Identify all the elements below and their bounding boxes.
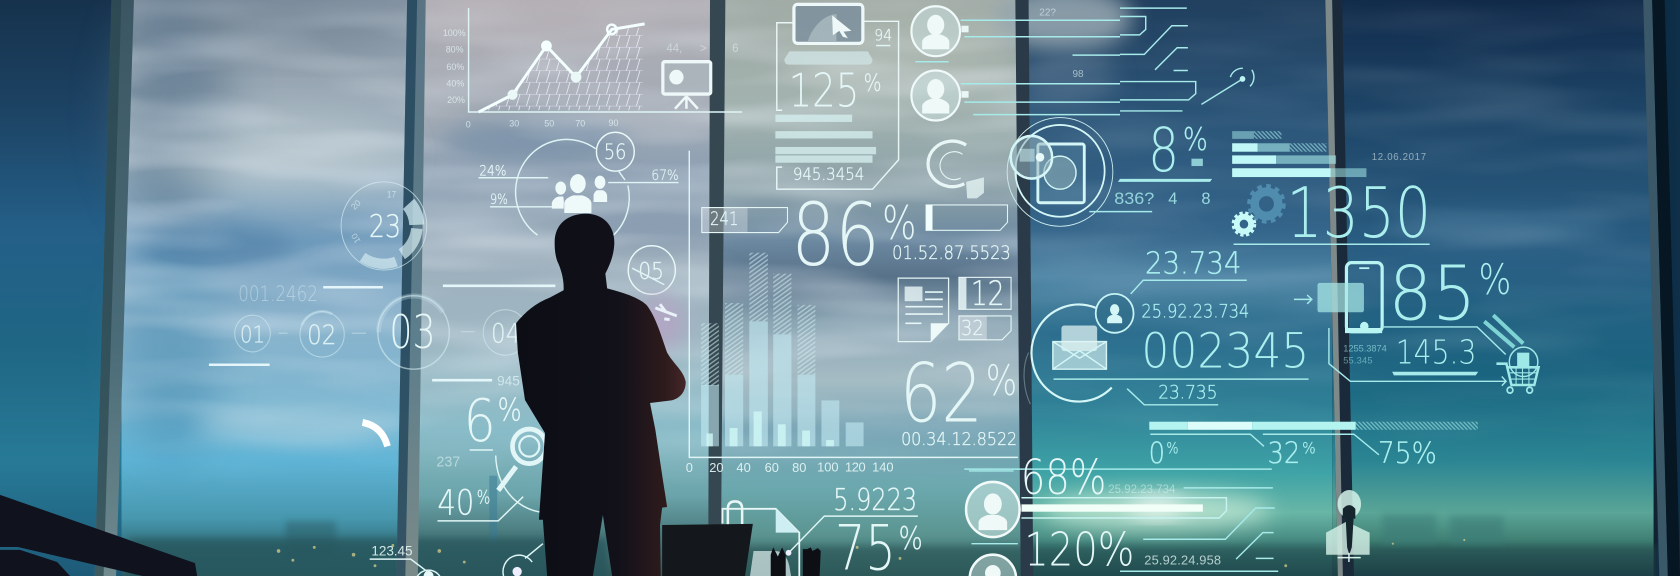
stat: 8 percent: 4	[1168, 189, 1177, 208]
line chart: 90	[609, 118, 619, 128]
stat: 8 percent	[1089, 116, 1212, 212]
stat: 62 percent: 62	[900, 347, 983, 441]
dashes and number 001.2462: 001.2462	[238, 281, 318, 306]
line chart: 30	[509, 119, 519, 129]
stat: 8 percent: 8	[1148, 116, 1179, 186]
people circle and percentages: 9%	[490, 192, 508, 208]
people circle and percentages	[479, 132, 679, 235]
bar chart: 120	[845, 460, 866, 475]
progress bar with 0, 32, 75 percent: %	[1166, 438, 1179, 458]
box 32: 32	[961, 317, 984, 340]
progress bar with 0, 32, 75 percent: 32	[1268, 435, 1300, 470]
inner bars	[706, 411, 834, 446]
panel: user rows	[911, 6, 1196, 120]
bar chart: 40	[736, 460, 751, 475]
step circles 01 to 04: 03	[389, 306, 436, 359]
progress bar with 0, 32, 75 percent: %	[1302, 438, 1316, 458]
user circle bottom	[970, 555, 1016, 576]
stat: 1350: 1350	[1286, 173, 1431, 254]
people circle and percentages: 56	[604, 139, 626, 164]
stat: 86 percent: 86	[791, 186, 880, 287]
tag 241: 241	[710, 209, 739, 230]
gauge: 23: 23	[369, 209, 401, 245]
stat: 68 percent with bar: 25.92.23.734	[1108, 484, 1176, 496]
circle 05	[628, 246, 675, 294]
line chart: 60%	[446, 62, 464, 72]
value: 145.3	[1343, 333, 1478, 375]
values: 23.734 and 25.92.23.734: 25.92.23.734	[1141, 302, 1249, 323]
icon: tablet rings and speech bubble	[1007, 118, 1113, 226]
panel: laptop report card: %	[864, 69, 881, 97]
arrow to cart	[1329, 328, 1506, 386]
value: 002345: 23.735	[1158, 382, 1218, 404]
stat: 85 percent: 85	[1389, 250, 1476, 338]
stat: 6 percent	[436, 374, 522, 471]
stacked bars	[1232, 131, 1426, 177]
icon: shopping cart	[1484, 315, 1539, 393]
bar chart	[686, 151, 1018, 475]
stat: 86 percent	[791, 186, 1011, 287]
panel: laptop report card	[775, 4, 899, 189]
values: 23.734 and 25.92.23.734	[1131, 246, 1249, 323]
stat: 6 percent: 237	[436, 454, 460, 471]
stacked bars: 12.06.2017	[1372, 152, 1426, 163]
stat: 8 percent: 836?	[1114, 189, 1154, 208]
dashes and number 001.2462	[209, 281, 555, 380]
gauge: 23: 10	[349, 231, 362, 245]
stat: 75 percent: %	[899, 521, 923, 557]
hatched bars	[701, 253, 815, 386]
stat: 40 percent: %	[477, 487, 490, 508]
step circles 01 to 04	[235, 296, 528, 369]
icon: mail in circle with user	[1024, 294, 1134, 404]
people circle and percentages: 67%	[651, 168, 679, 184]
value: 002345	[1054, 324, 1309, 405]
values: 23.734 and 25.92.23.734: 23.734	[1145, 246, 1241, 282]
stat: 6 percent: 945	[497, 374, 520, 389]
chair silhouette	[0, 495, 197, 576]
box 32	[959, 316, 1011, 340]
circle 05: 05	[638, 259, 664, 285]
stat: 86 percent: %	[882, 196, 916, 250]
stat: 62 percent: %	[986, 355, 1017, 405]
value: 145.3: 55.345	[1343, 355, 1373, 366]
icon: C arc and note	[928, 141, 984, 198]
line chart	[443, 8, 742, 129]
icon: laptop	[784, 4, 872, 65]
laptop silhouette on desk	[662, 524, 753, 576]
stat: 40 percent	[438, 483, 523, 523]
line chart: 50	[544, 119, 554, 129]
progress bar with 0, 32, 75 percent: 75%	[1378, 435, 1437, 470]
stat: 8 percent: %	[1183, 121, 1208, 158]
label 123.45	[370, 543, 442, 576]
panel: laptop report card: 94	[874, 25, 892, 44]
line chart: 6	[732, 43, 739, 55]
line chart: 44,	[666, 43, 682, 55]
report bars	[775, 115, 876, 163]
value: 145.3: 145.3	[1396, 333, 1476, 372]
line chart: 100%	[443, 28, 466, 38]
icon: gears	[1233, 186, 1284, 235]
empty progress box	[926, 205, 1008, 230]
pink glow and dart	[636, 296, 686, 351]
icon: magnifier	[496, 429, 546, 512]
panel: user rows: 22?	[1039, 7, 1056, 18]
distant city skyline	[129, 476, 1657, 576]
line chart: >	[700, 43, 707, 55]
stat: 8 percent: 8	[1201, 189, 1211, 208]
user circle	[966, 482, 1020, 537]
small user icon near legs	[503, 544, 543, 576]
icon: phone with card	[1294, 263, 1382, 332]
people circle and percentages: 24%	[479, 163, 506, 180]
label 123.45: 123.45	[371, 543, 413, 558]
panel: laptop report card: 945.3454	[793, 165, 864, 184]
bar chart: 80	[792, 460, 806, 475]
stat: 6 percent: 6	[464, 386, 496, 455]
line chart: 80%	[446, 44, 464, 55]
step circles 01 to 04: 02	[307, 321, 336, 351]
stat: 68 percent with bar: 68%	[1021, 450, 1106, 506]
gauge: 23	[341, 182, 427, 270]
solid bars	[701, 321, 864, 446]
gauge: 23: 20	[349, 198, 363, 212]
step circles 01 to 04: 04	[491, 319, 520, 349]
value: 002345: 002345	[1141, 324, 1309, 380]
line chart: 70	[575, 119, 585, 129]
bar chart: 60	[765, 460, 779, 475]
stat: 120 percent with circuit lines	[971, 508, 1278, 576]
person silhouette	[516, 214, 686, 576]
stat: 120 percent with circuit lines: 120%	[1024, 523, 1134, 576]
step circles 01 to 04: 01	[240, 321, 265, 348]
line chart: 0	[466, 119, 471, 129]
stat: 68 percent with bar	[969, 450, 1273, 518]
stat: 75 percent	[786, 512, 923, 576]
stat: 120 percent with circuit lines: 25.92.24.958	[1144, 552, 1221, 568]
stat: 6 percent: %	[498, 392, 522, 429]
value: 5.9223: 5.9223	[833, 482, 917, 518]
stat: 86 percent: 01.52.87.5523	[892, 243, 1011, 264]
tag 241	[702, 208, 788, 233]
value: 5.9223	[789, 482, 918, 553]
value: 145.3: 1255.3874	[1343, 342, 1387, 354]
line chart: 40%	[446, 78, 464, 88]
icon: clipped document	[722, 501, 799, 576]
stat: 85 percent	[1382, 250, 1511, 354]
white arc	[362, 422, 388, 446]
bar chart: 20	[709, 460, 724, 475]
bar chart: 100	[817, 460, 839, 475]
progress bar with 0, 32, 75 percent: 0	[1149, 435, 1165, 470]
stat: 85 percent: %	[1479, 254, 1511, 304]
progress bar with 0, 32, 75 percent	[964, 422, 1478, 470]
stat: 62 percent: 00.34.12.8522	[901, 430, 1017, 450]
icon: businessman	[1326, 490, 1370, 562]
box 12: 12	[971, 273, 1005, 313]
gauge: 23: 17	[387, 190, 396, 200]
icon: pin with rings	[1201, 68, 1254, 104]
bar chart: 140	[872, 459, 894, 474]
pens in cup	[771, 547, 821, 576]
line chart: 20%	[447, 95, 465, 105]
icon: document with portrait	[898, 278, 949, 342]
bar chart: 0	[686, 460, 693, 475]
stat: 40 percent: 40	[438, 483, 474, 523]
panel: user rows: 98	[1072, 69, 1084, 80]
panel: laptop report card: 125	[789, 64, 859, 118]
icon: projector screen	[663, 62, 711, 109]
